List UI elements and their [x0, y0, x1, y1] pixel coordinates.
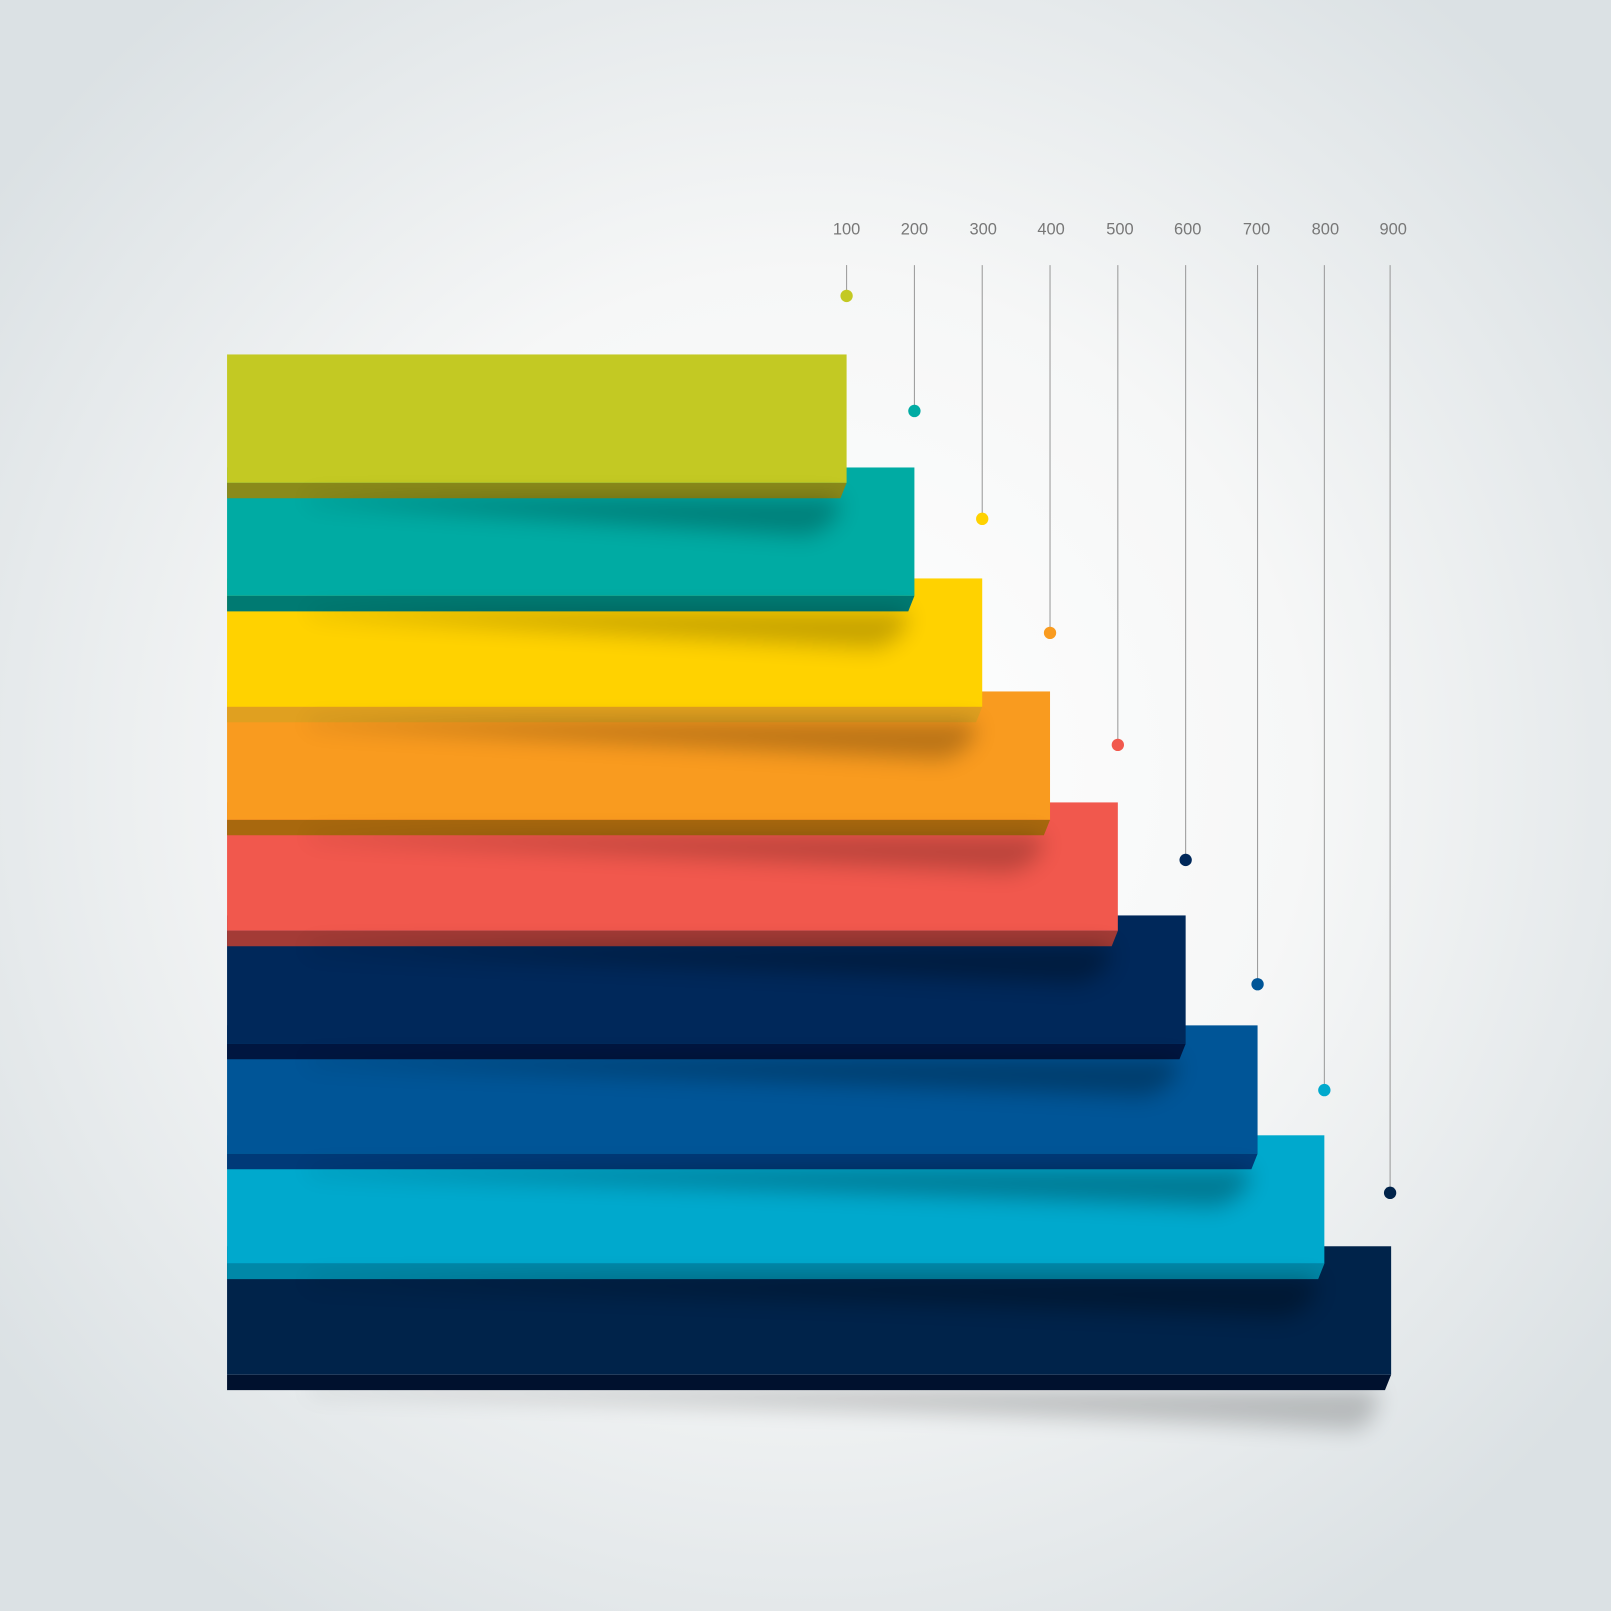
axis labels: 600	[1174, 220, 1201, 238]
axis labels: 300	[970, 220, 997, 238]
axis labels: 100	[833, 220, 860, 238]
axis labels: 200	[901, 220, 928, 238]
axis labels: 500	[1106, 220, 1134, 238]
axis labels: 800	[1312, 220, 1339, 238]
axis labels: 400	[1037, 220, 1065, 238]
bar 100	[227, 354, 847, 535]
bar 400	[227, 691, 1050, 872]
bar 500	[227, 802, 1118, 983]
bar 700	[227, 1025, 1258, 1206]
axis labels: 900	[1379, 220, 1407, 238]
bar 300	[227, 578, 982, 759]
leader lines and dots	[847, 265, 1390, 1193]
axis labels: 700	[1243, 220, 1270, 238]
floor shadow	[308, 1389, 1378, 1430]
axis labels	[833, 220, 1407, 238]
bar 200	[227, 467, 914, 648]
bar 900	[227, 1246, 1391, 1390]
bar 800	[227, 1135, 1324, 1317]
bar 600	[227, 915, 1186, 1096]
